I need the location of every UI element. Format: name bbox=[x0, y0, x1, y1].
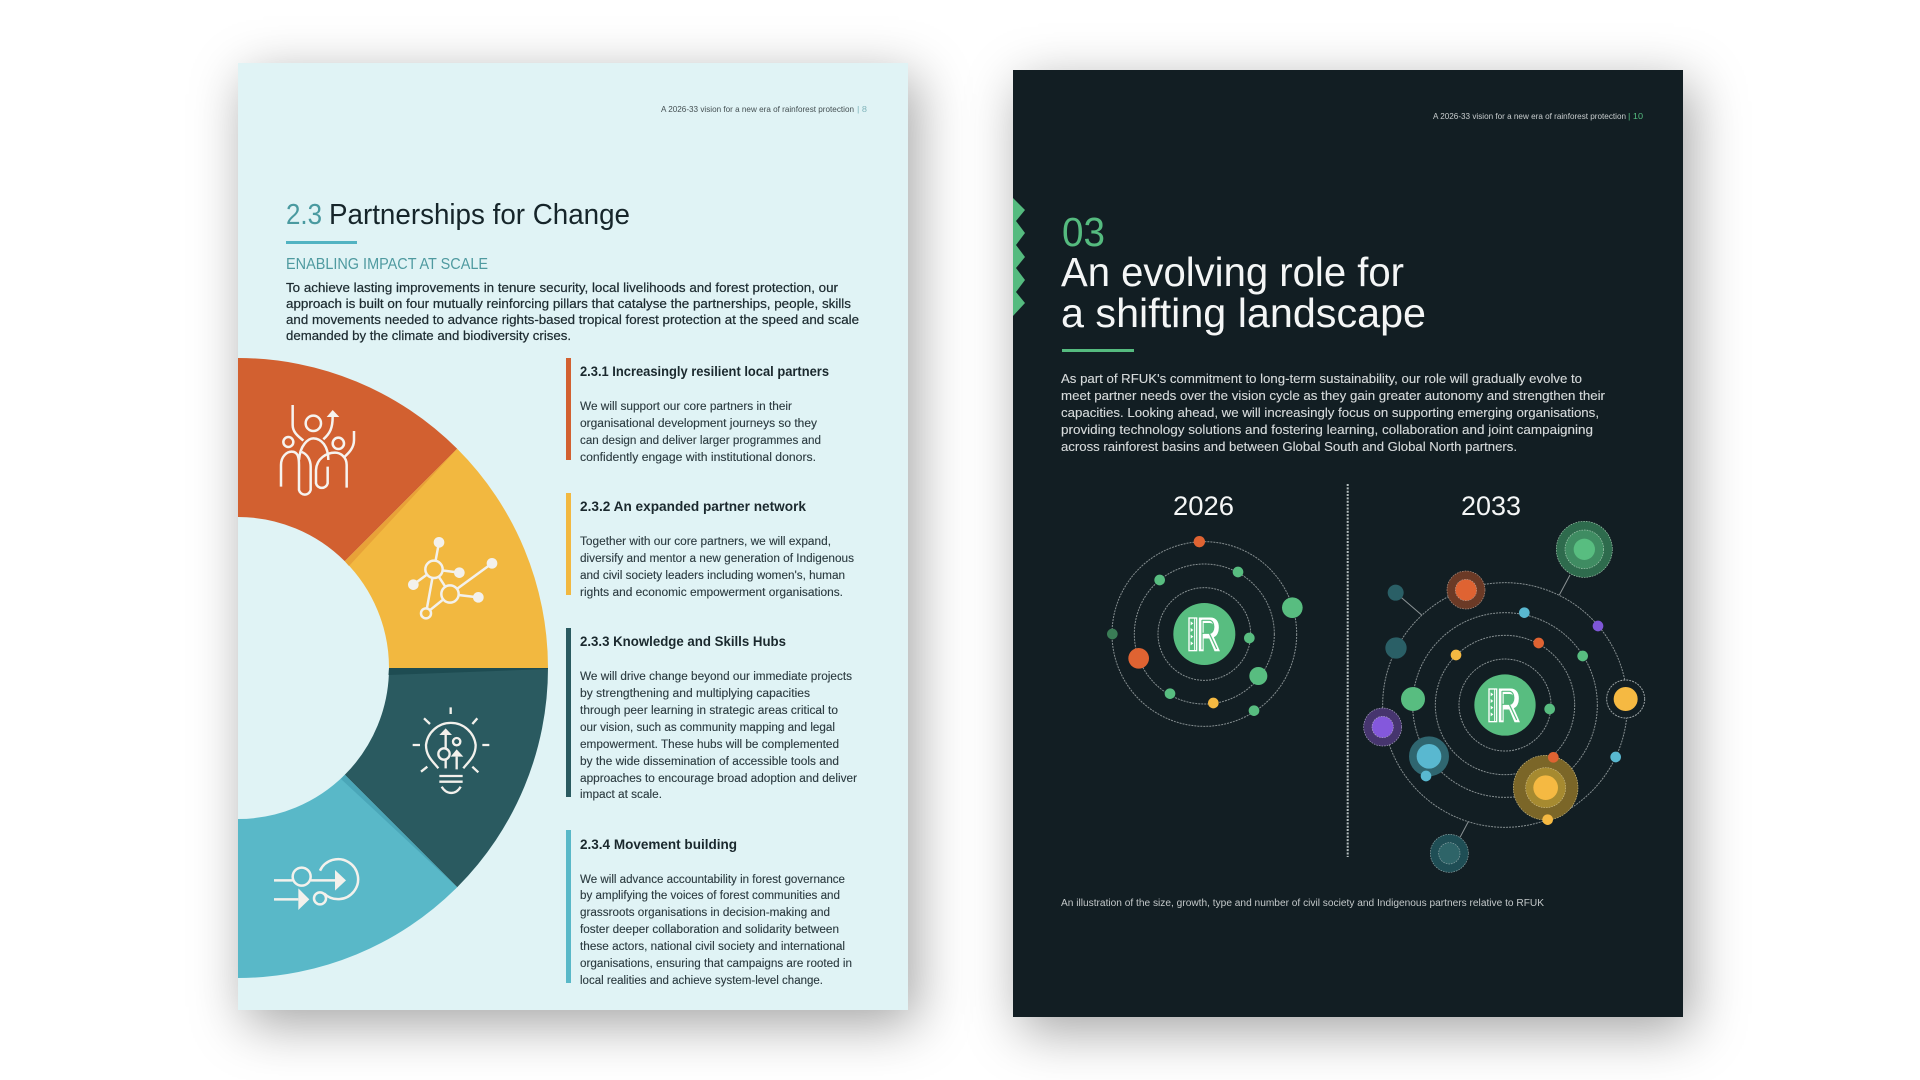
title underline bbox=[286, 241, 357, 244]
panel: right page, an evolving role bbox=[1013, 70, 1683, 1017]
body 2.3.3: We will drive change beyond our immediate projects bbox=[580, 671, 852, 683]
panel: left page, partnerships for change bbox=[238, 63, 908, 1010]
body 2.3.2: diversify and mentor a new generation of Indigenous bbox=[580, 553, 854, 565]
intro text: meet partner needs over the vision cycle as they gain greater autonomy and strengthen their bbox=[1061, 388, 1606, 403]
body 2.3.1 bbox=[580, 401, 821, 464]
body 2.3.4: organisations, ensuring that campaigns are rooted in bbox=[580, 958, 852, 970]
title: a shifting landscape bbox=[1061, 290, 1426, 336]
body 2.3.3: approaches to encourage broad adoption and deliver bbox=[580, 773, 857, 785]
running header: A 2026-33 vision for a new era of rainforest protection bbox=[661, 105, 854, 114]
body 2.3.4 bbox=[580, 874, 852, 987]
body 2.3.3: empowerment. These hubs will be complemented bbox=[580, 739, 839, 751]
small partner dots bbox=[1385, 585, 1621, 825]
body 2.3.4: We will advance accountability in forest governance bbox=[580, 874, 845, 886]
segment shading: yellow edge bbox=[345, 449, 457, 566]
icon: people with rising arrow bbox=[281, 405, 354, 495]
title: Partnerships for Change bbox=[329, 199, 630, 231]
intro text: As part of RFUK's commitment to long-term sustainability, our role will gradually evolve to bbox=[1061, 371, 1582, 386]
segment shading: blue edge bbox=[341, 775, 457, 887]
body 2.3.2: rights and economic empowerment organisations. bbox=[580, 587, 843, 599]
heading 2.3.2: 2.3.2 An expanded partner network bbox=[580, 499, 806, 514]
accent bar: orange bbox=[566, 358, 571, 460]
icon: arrows through circles bbox=[274, 859, 358, 910]
running header: | 10 bbox=[1628, 112, 1644, 121]
orbit rings bbox=[1383, 583, 1627, 827]
body 2.3.2: and civil society leaders including women's, human bbox=[580, 570, 845, 582]
partner: orange bbox=[1447, 571, 1485, 609]
body 2.3.4: grassroots organisations in decision-making and bbox=[580, 907, 830, 919]
intro text bbox=[286, 280, 859, 343]
partner: purple bbox=[1364, 708, 1402, 746]
segment: yellow bbox=[345, 449, 548, 668]
running header: A 2026-33 vision for a new era of rainforest protection bbox=[1433, 112, 1626, 121]
body 2.3.1: confidently engage with institutional donors. bbox=[580, 452, 816, 464]
heading 2.3.3: 2.3.3 Knowledge and Skills Hubs bbox=[580, 634, 786, 649]
title underline bbox=[1062, 349, 1134, 352]
body 2.3.4: foster deeper collaboration and solidarity between bbox=[580, 924, 839, 936]
heading 2.3.4: 2.3.4 Movement building bbox=[580, 837, 737, 852]
intro text: approach is built on four mutually reinforcing pillars that catalyse the partnerships, people, skills bbox=[286, 296, 852, 311]
title: 2.3 bbox=[286, 199, 322, 231]
large partner: green bbox=[1556, 521, 1612, 577]
intro text bbox=[1061, 371, 1606, 454]
RFUK logo: R bbox=[1497, 678, 1521, 733]
caption: An illustration of the size, growth, type and number of civil society and Indigenous partners relative to RFUK bbox=[1061, 898, 1544, 909]
segment: dark teal bbox=[345, 668, 548, 887]
intro text: demanded by the climate and biodiversity crises. bbox=[286, 328, 571, 343]
large partner: yellow bbox=[1513, 755, 1578, 820]
orbit diagram 2026 bbox=[1107, 536, 1303, 726]
body 2.3.1: organisational development journeys so they bbox=[580, 418, 817, 430]
year label 2026: 2026 bbox=[1173, 491, 1234, 521]
body 2.3.1: We will support our core partners in their bbox=[580, 401, 792, 413]
icon: light bulb with arrows bbox=[413, 707, 489, 793]
connector lines bbox=[1396, 575, 1570, 837]
RFUK logo bbox=[1173, 603, 1235, 665]
body 2.3.3: our vision, such as community mapping and legal bbox=[580, 722, 835, 734]
accent bar: dark teal bbox=[566, 628, 571, 797]
body 2.3.3: by strengthening and multiplying capacities bbox=[580, 688, 810, 700]
heading 2.3.1: 2.3.1 Increasingly resilient local partners bbox=[580, 364, 829, 379]
body 2.3.4: these actors, national civil society and international bbox=[580, 941, 845, 953]
segment: light blue bbox=[238, 775, 457, 978]
segment: orange bbox=[238, 358, 457, 561]
body 2.3.3: by the wide dissemination of accessible tools and bbox=[580, 756, 839, 768]
intro text: providing technology solutions and fostering learning, collaboration and joint campaigning bbox=[1061, 422, 1593, 437]
body 2.3.2 bbox=[580, 536, 854, 599]
pillar 2.3.4 bbox=[566, 830, 852, 987]
donut chart: four pillars bbox=[238, 358, 548, 978]
intro text: To achieve lasting improvements in tenure security, local livelihoods and forest protection, our bbox=[286, 280, 839, 295]
intro text: and movements needed to advance rights-based tropical forest protection at the speed and scale bbox=[286, 312, 859, 327]
orbit rings bbox=[1112, 542, 1297, 726]
body 2.3.2: Together with our core partners, we will expand, bbox=[580, 536, 831, 548]
body 2.3.4: by amplifying the voices of forest communities and bbox=[580, 890, 840, 902]
year label 2033: 2033 bbox=[1461, 491, 1521, 521]
partner: dark teal ringed bbox=[1430, 834, 1468, 872]
intro text: capacities. Looking ahead, we will increasingly focus on supporting emerging organisations, bbox=[1061, 405, 1599, 420]
subtitle: ENABLING IMPACT AT SCALE bbox=[286, 256, 488, 273]
body 2.3.3 bbox=[580, 671, 857, 801]
body 2.3.3: impact at scale. bbox=[580, 789, 662, 801]
icon: network bbox=[408, 537, 497, 618]
chevron edge decoration bbox=[1013, 198, 1025, 316]
segment shading: dark teal edge bbox=[388, 668, 548, 675]
body 2.3.1: can design and deliver larger programmes and bbox=[580, 435, 821, 447]
RFUK logo bbox=[1474, 674, 1536, 736]
body 2.3.3: through peer learning in strategic areas critical to bbox=[580, 705, 838, 717]
running header: | 8 bbox=[857, 105, 868, 114]
partner: blue bbox=[1409, 736, 1449, 776]
partner: ringed yellow bbox=[1607, 680, 1645, 718]
title: An evolving role for bbox=[1061, 249, 1404, 295]
pillar 2.3.2 bbox=[566, 493, 854, 599]
intro text: across rainforest basins and between Global South and Global North partners. bbox=[1061, 439, 1517, 454]
accent bar: light blue bbox=[566, 830, 571, 983]
partner dots bbox=[1107, 536, 1303, 716]
title bbox=[1061, 249, 1426, 336]
accent bar: yellow bbox=[566, 493, 571, 595]
body 2.3.4: local realities and achieve system-level change. bbox=[580, 975, 823, 987]
pillar 2.3.1 bbox=[566, 358, 829, 464]
orbit diagram 2033 bbox=[1364, 521, 1645, 872]
pillar 2.3.3 bbox=[566, 628, 857, 801]
RFUK logo: R bbox=[1197, 607, 1221, 662]
dotted divider bbox=[1347, 484, 1349, 857]
section number: 03 bbox=[1062, 209, 1105, 255]
